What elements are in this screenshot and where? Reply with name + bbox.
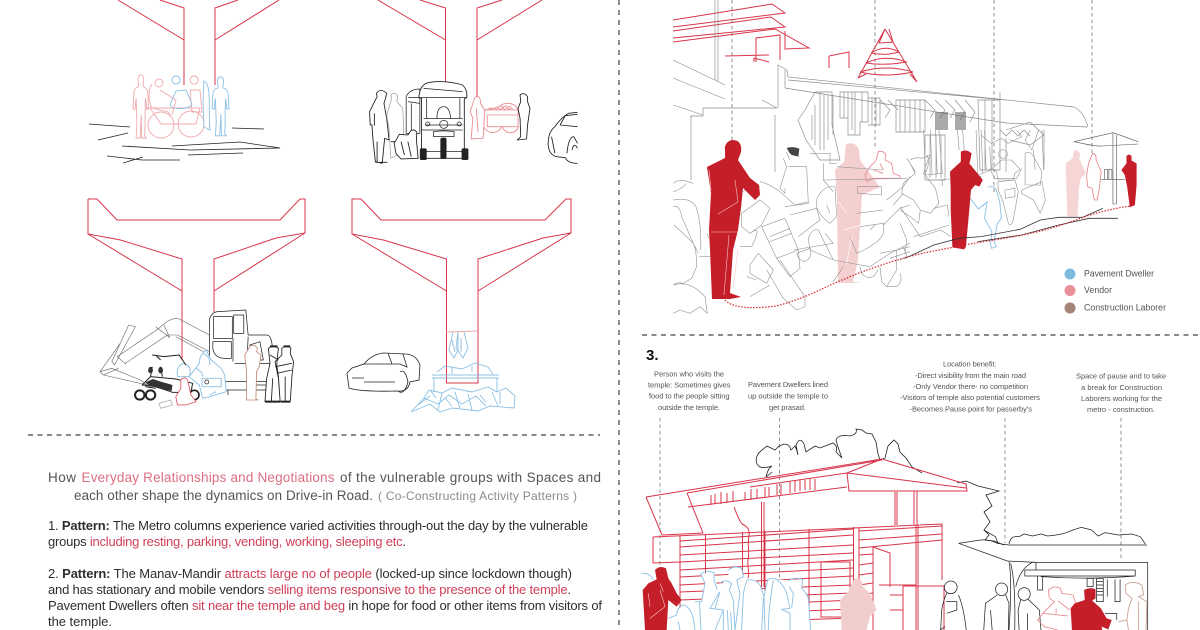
black workers bbox=[265, 346, 294, 402]
callout: space of pause: Space of pause and to take bbox=[1076, 372, 1166, 380]
cab and body bbox=[209, 310, 272, 390]
callout: space of pause: a break for Construction bbox=[1081, 383, 1162, 392]
tree over canopy bbox=[984, 527, 1145, 544]
legend: Construction Laborer bbox=[1084, 302, 1166, 312]
callout: pavement dwellers: Pavement Dwellers lined bbox=[748, 380, 828, 389]
blue queue of dwellers bbox=[642, 567, 811, 630]
red building bbox=[673, 4, 849, 68]
hanging clothes bbox=[798, 92, 1044, 180]
panel: temple street scene 2 bbox=[673, 0, 1166, 314]
text block: pattern 2 bbox=[48, 566, 602, 629]
red figure folds bbox=[709, 170, 738, 295]
callout: space of pause: metro - construction. bbox=[1087, 405, 1155, 414]
rear rickshaw bbox=[406, 89, 420, 133]
grey buildings and shop roof bbox=[673, 0, 1088, 180]
panel: metro column with sleeping dwellers bbox=[347, 199, 571, 412]
trees bbox=[756, 429, 922, 477]
callout: location benefit: Location benefit: bbox=[943, 360, 996, 368]
stall scene bbox=[940, 527, 1148, 630]
callout: pavement dwellers: up outside the temple to bbox=[748, 392, 828, 400]
panel: temple scene 3 bbox=[642, 347, 1166, 630]
callout: visitor bbox=[648, 370, 731, 412]
metro column outline bbox=[118, 0, 279, 85]
pale pink ghost bbox=[840, 578, 877, 630]
text block: pattern 1 bbox=[48, 518, 588, 549]
second red figure bbox=[950, 150, 983, 249]
callout: space of pause bbox=[1076, 372, 1166, 414]
blue dwellers bbox=[177, 350, 226, 398]
callout leader lines bbox=[660, 418, 1121, 580]
text block: pattern 2: 2. Pattern: The Manav-Mandir attracts large no of people (locked-up since lockdown though) bbox=[48, 566, 572, 581]
blue seated and standing figures bbox=[170, 76, 229, 136]
beige customer bbox=[1118, 582, 1147, 630]
ground lines bbox=[905, 208, 1118, 258]
text block: intro heading: of the vulnerable groups with Spaces and bbox=[340, 470, 601, 485]
red vine bbox=[734, 507, 749, 578]
divider: vertical dashed bbox=[618, 0, 620, 630]
customer bbox=[517, 94, 530, 140]
blue pile of dwellers bbox=[411, 387, 515, 412]
text block: intro heading: Everyday Relationships and Negotiations bbox=[82, 470, 335, 485]
legend: Vendor bbox=[1084, 285, 1112, 295]
callout: visitor: Person who visits the bbox=[654, 370, 724, 378]
blue bed with sleeper bbox=[432, 363, 499, 392]
pale pink ghost person bbox=[835, 143, 880, 283]
two customers bbox=[984, 583, 1041, 630]
washing line bbox=[446, 331, 478, 332]
callout leader lines bbox=[732, 0, 1092, 195]
hanging clothes bbox=[449, 332, 468, 358]
car bbox=[347, 353, 420, 392]
pink standing man bbox=[133, 75, 149, 138]
vendor woman bbox=[1087, 153, 1101, 200]
seated person bbox=[391, 130, 418, 159]
canopy and shelves bbox=[959, 540, 1148, 630]
temple slats bbox=[711, 479, 815, 505]
red stupa bbox=[858, 29, 917, 82]
rickshaw bbox=[419, 82, 468, 160]
left customer bbox=[940, 581, 966, 630]
white backdrop of queue bbox=[668, 567, 811, 630]
pink vendor bbox=[470, 96, 485, 139]
callout: visitor: outside the temple. bbox=[658, 403, 720, 412]
vendor seated bbox=[865, 151, 900, 182]
toolbox bbox=[159, 400, 172, 408]
temple posts and fence bbox=[653, 491, 942, 630]
text block: intro heading: each other shape the dynamics on Drive-in Road. bbox=[74, 488, 373, 503]
excavator scene drawing bbox=[100, 310, 294, 408]
red dotted route bbox=[725, 206, 1131, 308]
temple roof bbox=[646, 459, 967, 535]
callout: visitor: food to the people sitting bbox=[649, 392, 730, 400]
counter box bbox=[1105, 613, 1117, 620]
third red figure bbox=[1121, 155, 1137, 207]
text block: intro heading: How bbox=[48, 470, 76, 485]
red visitor folds bbox=[648, 583, 665, 618]
panel: metro column with resting vendors bbox=[89, 0, 280, 163]
text block: pattern 2: and has stationary and mobile vendors selling items responsive to the presence of the temple. bbox=[48, 582, 571, 597]
standing man bbox=[370, 90, 389, 163]
number label: 3. bbox=[646, 347, 659, 364]
metro column outline bbox=[378, 0, 542, 97]
ground strokes bbox=[89, 124, 280, 163]
callout: location benefit bbox=[900, 360, 1040, 414]
car cropped bbox=[548, 112, 578, 163]
motorbikes bbox=[135, 355, 199, 400]
scooters and seated man left bbox=[673, 147, 910, 313]
callout: visitor: temple: Sometimes gives bbox=[648, 380, 731, 390]
rickshaw scene drawing bbox=[370, 82, 578, 163]
text block: pattern 2: the temple. bbox=[48, 614, 112, 629]
text block: pattern 1: 1. Pattern: The Metro columns experience varied activities through-out the day by the vulnerable bbox=[48, 518, 588, 533]
callout: location benefit: -Only Vendor there- no competition bbox=[913, 382, 1028, 391]
text block: pattern 2: Pavement Dwellers often sit near the temple and beg in hope for food or other items from visitors of bbox=[48, 598, 602, 613]
metro column outline bbox=[88, 199, 305, 360]
divider: right horizontal dashed bbox=[642, 334, 1200, 336]
text block: intro heading: ( Co-Constructing Activity Patterns ) bbox=[378, 489, 577, 503]
boom arm bbox=[100, 319, 209, 385]
callout: pavement dwellers bbox=[748, 380, 828, 412]
text block: pattern 1: groups including resting, parking, vending, working, sleeping etc. bbox=[48, 534, 406, 549]
callout: location benefit: -Becomes Pause point for passerby's bbox=[910, 404, 1032, 414]
panel: metro column with auto rickshaw bbox=[370, 0, 578, 163]
red visitor bbox=[643, 567, 682, 630]
fruit cart bbox=[484, 103, 519, 133]
pink crouching worker bbox=[176, 378, 196, 405]
pink vendor bbox=[1038, 587, 1076, 630]
callout: pavement dwellers: get prasad. bbox=[769, 403, 806, 412]
legend: Pavement Dweller bbox=[1084, 268, 1154, 278]
cycle with seated vendor bbox=[146, 76, 204, 138]
pale pink man bbox=[1066, 150, 1086, 217]
umbrella and table bbox=[1074, 133, 1138, 204]
metro column outline bbox=[352, 199, 571, 383]
callout: space of pause: Laborers working for the bbox=[1081, 394, 1162, 403]
seated woman, rider and shop details bbox=[900, 130, 1138, 260]
divider: left horizontal dashed bbox=[28, 434, 600, 436]
ghost person bbox=[387, 93, 404, 158]
panel: metro column with excavator bbox=[88, 199, 305, 408]
text block: intro heading bbox=[48, 470, 601, 503]
beige worker bbox=[245, 345, 261, 400]
large red figure bbox=[707, 140, 760, 299]
red stall worker bbox=[1071, 588, 1112, 630]
callout: location benefit: -Visitors of temple also potential customers bbox=[900, 393, 1040, 402]
blue child bbox=[970, 187, 1001, 248]
callout: location benefit: -Direct visibility from the main road bbox=[915, 371, 1026, 380]
queue at the temple bbox=[642, 567, 877, 630]
legend bbox=[1064, 268, 1166, 314]
